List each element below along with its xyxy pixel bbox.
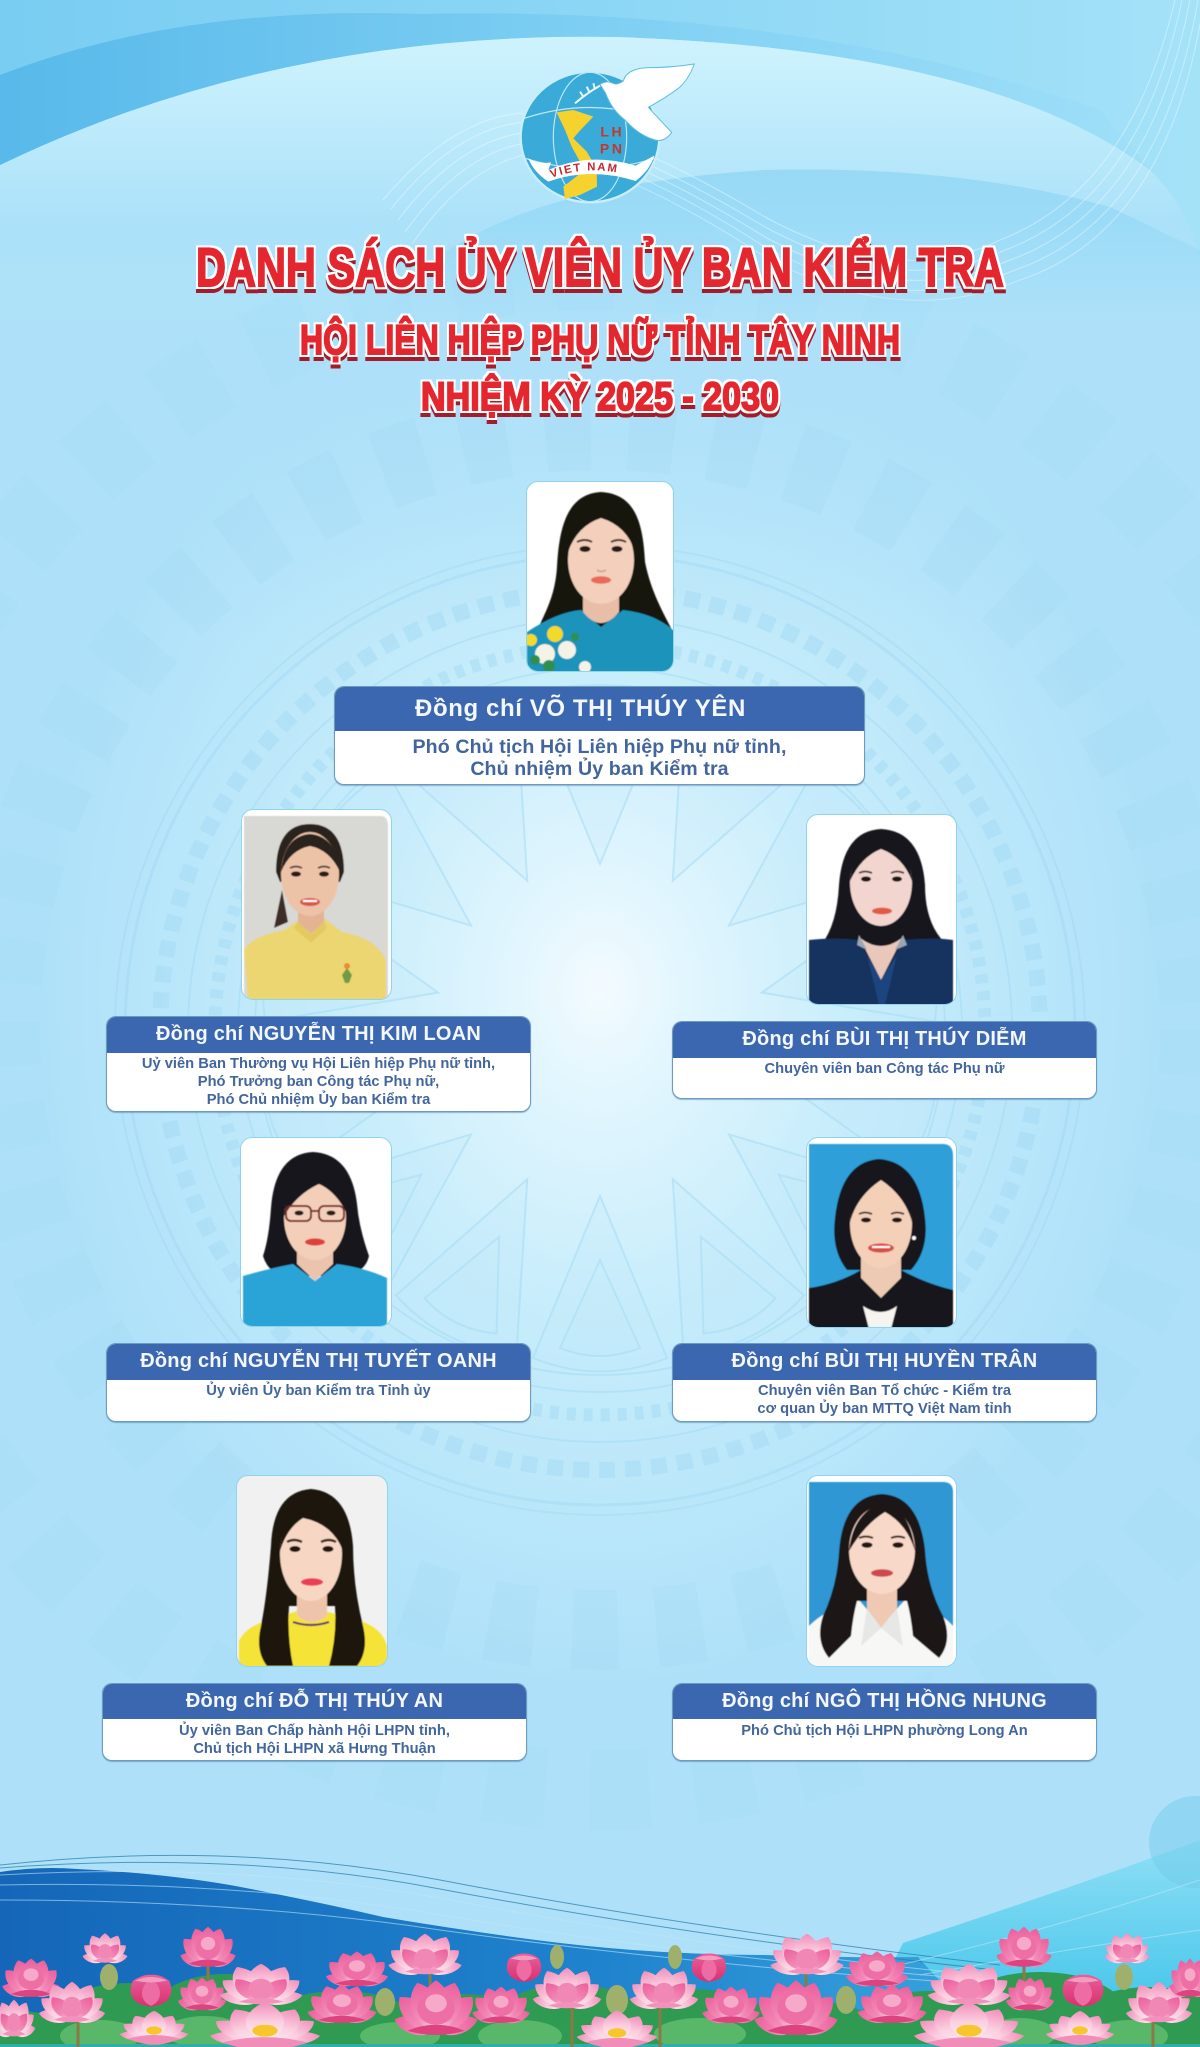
logo: Hội Liên hiệp Phụ nữ Việt Nam emblem: VIET NAM xyxy=(549,162,617,177)
name xyxy=(103,1684,526,1719)
leaves xyxy=(0,1972,1200,2047)
small buds xyxy=(100,1945,1133,2016)
role: Phó Chủ tịch Hội LHPN phường Long An xyxy=(741,1723,1028,1739)
olive branch xyxy=(575,83,600,103)
card: Đỗ Thị Thúy An xyxy=(102,1683,527,1761)
photo: Võ Thị Thúy Yên xyxy=(526,481,674,672)
role: Phó Trưởng ban Công tác Phụ nữ, xyxy=(198,1074,439,1090)
flowers xyxy=(0,1926,1200,2047)
name: Đồng chí VÕ THỊ THÚY YÊN xyxy=(415,695,746,722)
photo: Đỗ Thị Thúy An xyxy=(236,1475,388,1667)
lotus field xyxy=(0,1926,1200,2047)
swoosh band xyxy=(383,169,1200,320)
logo: Hội Liên hiệp Phụ nữ Việt Nam emblem: LH xyxy=(600,123,624,139)
name: Đồng chí BÙI THỊ THÚY DIỄM xyxy=(742,1028,1027,1050)
name: Đồng chí NGUYỄN THỊ KIM LOAN xyxy=(156,1023,481,1045)
card: Nguyễn Thị Kim Loan xyxy=(106,1016,531,1112)
stems xyxy=(78,1965,1153,2047)
card: Ngô Thị Hồng Nhung xyxy=(672,1683,1097,1761)
role xyxy=(757,1383,1012,1417)
photo: Bùi Thị Thúy Diễm xyxy=(806,814,957,1005)
role: Phó Chủ tịch Hội Liên hiệp Phụ nữ tỉnh, xyxy=(412,736,786,758)
bottom waves xyxy=(850,1840,1200,2047)
name: Đồng chí NGUYỄN THỊ TUYẾT OANH xyxy=(140,1350,497,1372)
name: Đồng chí NGÔ THỊ HỒNG NHUNG xyxy=(722,1690,1047,1712)
role: cơ quan Ủy ban MTTQ Việt Nam tỉnh xyxy=(757,1401,1012,1417)
map of Viet Nam xyxy=(557,110,597,199)
role: Chuyên viên Ban Tổ chức - Kiểm tra xyxy=(758,1383,1011,1399)
title: HỘI LIÊN HIỆP PHỤ NỮ TỈNH TÂY NINH xyxy=(300,315,900,363)
title: NHIỆM KỲ 2025 - 2030 xyxy=(421,373,779,419)
card: Bùi Thị Huyền Trân xyxy=(672,1343,1097,1422)
photo: Nguyễn Thị Tuyết Oanh xyxy=(240,1137,392,1327)
dove xyxy=(600,64,694,140)
role: Chủ tịch Hội LHPN xã Hưng Thuận xyxy=(193,1741,436,1757)
role xyxy=(179,1722,450,1757)
name xyxy=(107,1344,530,1380)
photo: Ngô Thị Hồng Nhung xyxy=(806,1475,957,1667)
role: Uỷ viên Ban Thường vụ Hội Liên hiệp Phụ nữ tỉnh, xyxy=(142,1056,495,1072)
card: Võ Thị Thúy Yên xyxy=(334,686,865,785)
name xyxy=(107,1017,530,1053)
role: Ủy viên Ủy ban Kiểm tra Tỉnh ủy xyxy=(206,1383,431,1399)
photo: Bùi Thị Huyền Trân xyxy=(806,1137,957,1328)
title xyxy=(196,234,1006,424)
role: Ủy viên Ban Chấp hành Hội LHPN tỉnh, xyxy=(179,1723,450,1739)
name xyxy=(673,1022,1096,1058)
photo: Nguyễn Thị Kim Loan xyxy=(241,809,392,1000)
name: Đồng chí ĐỖ THỊ THÚY AN xyxy=(186,1690,443,1712)
banner xyxy=(528,156,654,182)
logo: Hội Liên hiệp Phụ nữ Việt Nam emblem xyxy=(520,63,695,204)
logo: Hội Liên hiệp Phụ nữ Việt Nam emblem: PN xyxy=(600,141,625,157)
role: Chủ nhiệm Ủy ban Kiểm tra xyxy=(470,758,729,780)
role xyxy=(412,736,786,780)
drum motif xyxy=(0,270,1200,1790)
role xyxy=(142,1056,495,1108)
name xyxy=(673,1684,1096,1719)
name xyxy=(673,1344,1096,1380)
card: Nguyễn Thị Tuyết Oanh xyxy=(106,1343,531,1422)
card: Bùi Thị Thúy Diễm xyxy=(672,1021,1097,1099)
name: Đồng chí BÙI THỊ HUYỀN TRÂN xyxy=(732,1350,1037,1372)
name xyxy=(335,687,864,731)
role: Phó Chủ nhiệm Ủy ban Kiểm tra xyxy=(207,1092,430,1108)
role: Chuyên viên ban Công tác Phụ nữ xyxy=(765,1061,1004,1077)
